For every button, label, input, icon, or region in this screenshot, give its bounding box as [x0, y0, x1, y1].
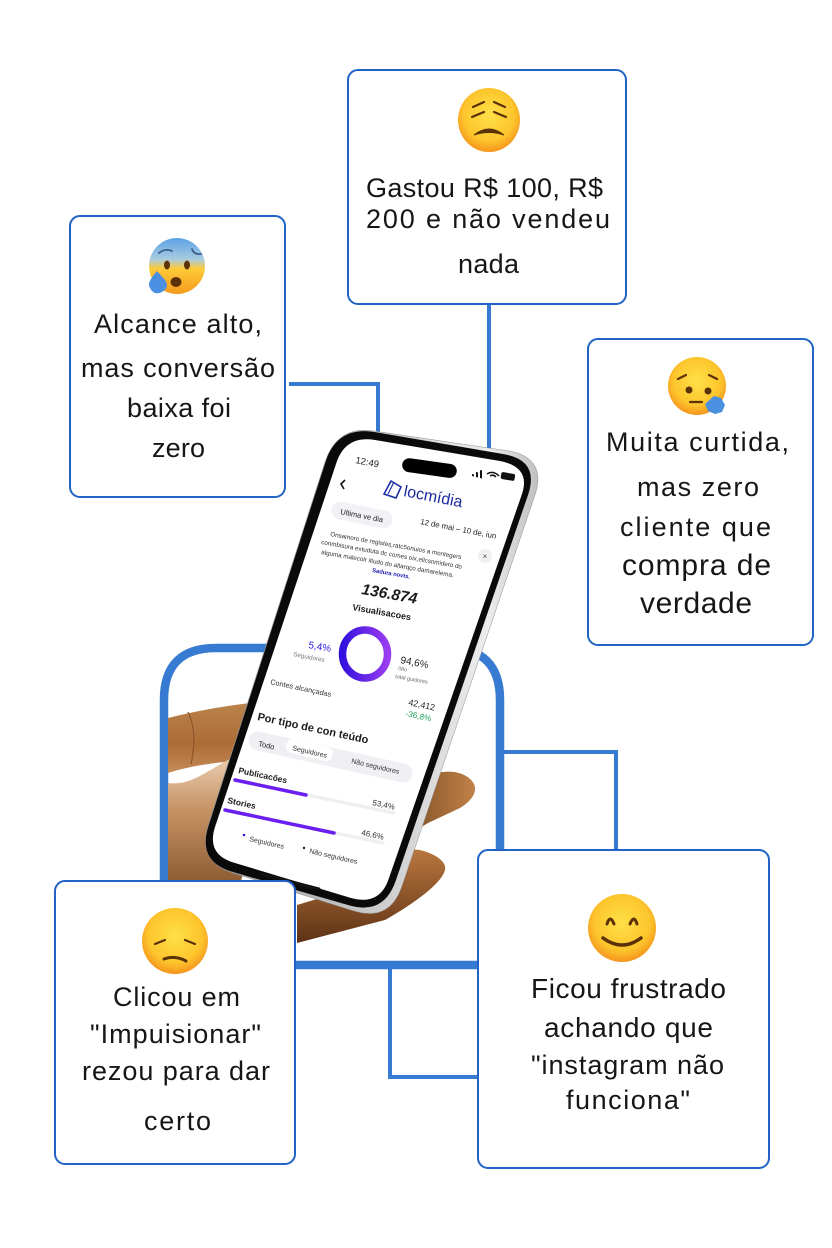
notice text: Onsamoro de registes,ratc5onuios a montegers — [330, 531, 462, 561]
text: muita curtida — [606, 427, 789, 620]
text: alcance: mas conversão — [81, 353, 275, 383]
total views — [352, 581, 419, 622]
back chevron — [341, 480, 345, 489]
tabs: Seguidores — [292, 745, 328, 760]
phone — [205, 430, 538, 914]
tabs: Todo — [258, 739, 275, 752]
dynamic island — [401, 457, 458, 479]
hand holding phone — [168, 700, 475, 943]
icon: crying face — [668, 357, 726, 415]
panel: clicou — [55, 881, 295, 1164]
bar: publicações: 53,4% — [372, 798, 396, 812]
non-followers share — [395, 655, 429, 686]
accounts reached — [270, 677, 436, 724]
text: frustrado: "instagram não — [531, 1050, 724, 1080]
text: gastou: Gastou R$ 100, R$ — [366, 173, 603, 203]
text: frustrado: Ficou frustrado — [531, 973, 726, 1004]
icon: weary face — [458, 88, 520, 152]
period selector: Ultima ve dia — [340, 507, 385, 524]
text: frustrado: funciona" — [566, 1085, 690, 1115]
followers share — [293, 640, 332, 664]
accounts reached: Contes alcançadas — [270, 677, 333, 699]
non-followers share: total guidores — [395, 674, 428, 686]
icon: cold sweat face — [149, 238, 205, 294]
total views: Visualisacoes — [352, 602, 412, 622]
text: muita curtida: Muita curtida, — [606, 427, 789, 457]
text: muita curtida: verdade — [640, 587, 752, 620]
panel: gastou — [348, 70, 626, 304]
text: clicou: rezou para dar — [82, 1056, 270, 1086]
text: clicou: "Impuisionar" — [90, 1019, 261, 1049]
notice close — [478, 549, 492, 563]
phone screen — [213, 439, 524, 900]
status bar: 12:49 — [354, 455, 380, 470]
non-followers share: 94,6% — [399, 655, 429, 671]
logo: locmídia — [402, 483, 464, 511]
text: alcance: baixa foi — [127, 393, 231, 423]
home indicator — [261, 874, 319, 889]
phone silver shell — [205, 430, 538, 914]
accounts reached: 42,412 — [408, 697, 436, 713]
text: gastou — [366, 173, 610, 279]
icon: smiling face — [588, 894, 656, 962]
period selector — [330, 500, 394, 530]
accounts reached: -36,8% — [405, 708, 433, 724]
total views: 136.874 — [360, 581, 419, 608]
bar: stories: Stories — [227, 795, 257, 811]
chart legend: Seguidores — [249, 836, 285, 851]
text: alcance — [81, 309, 275, 463]
date range: 12 de mai – 10 de, iun — [420, 517, 497, 541]
non-followers share: 0tlo — [398, 666, 407, 674]
panel: muita curtida — [588, 339, 813, 645]
chart legend: Não seguidores — [309, 848, 358, 866]
followers share: 5,4% — [307, 640, 332, 655]
bar: stories — [225, 795, 385, 843]
icon: pensive face — [142, 908, 208, 974]
text: muita curtida: compra de — [622, 549, 771, 582]
text: clicou: certo — [144, 1106, 211, 1136]
bar: publicações: Publicacões — [238, 765, 288, 785]
connector lines — [289, 304, 616, 1077]
text: frustrado — [531, 973, 726, 1115]
notice text: Sadura novts. — [372, 568, 411, 581]
tabs: Não seguidores — [351, 758, 400, 776]
bar: publicações — [235, 765, 396, 813]
panel: alcance — [70, 216, 285, 497]
bar: stories: 46,6% — [361, 828, 385, 842]
background frame — [164, 648, 500, 965]
text: clicou: Clicou em — [113, 982, 240, 1012]
text: gastou: nada — [458, 249, 520, 279]
notice text: conmbisura extuduta dc comes oix,ellcsnmidero do — [321, 539, 463, 571]
notice close: × — [483, 552, 488, 561]
text: alcance: Alcance alto, — [94, 309, 262, 339]
phone bezel — [206, 431, 531, 908]
text: muita curtida: mas zero — [637, 472, 759, 502]
text: muita curtida: cliente que — [620, 512, 771, 542]
donut chart — [342, 630, 388, 678]
text: alcance: zero — [152, 433, 205, 463]
section heading: Por tipo de con teúdo — [256, 711, 370, 746]
text: frustrado: achando que — [544, 1012, 713, 1043]
text: clicou — [82, 982, 270, 1136]
status bar — [354, 455, 515, 481]
tabs — [258, 738, 403, 776]
followers share: Seguidores — [293, 651, 325, 664]
chart legend — [243, 834, 358, 866]
text: gastou: 200 e não vendeu — [366, 204, 610, 234]
panel: frustrado — [478, 850, 769, 1168]
notice text — [321, 531, 463, 581]
notice text: alguma malecolr iltudo do altarqço damarelema. — [321, 549, 454, 579]
